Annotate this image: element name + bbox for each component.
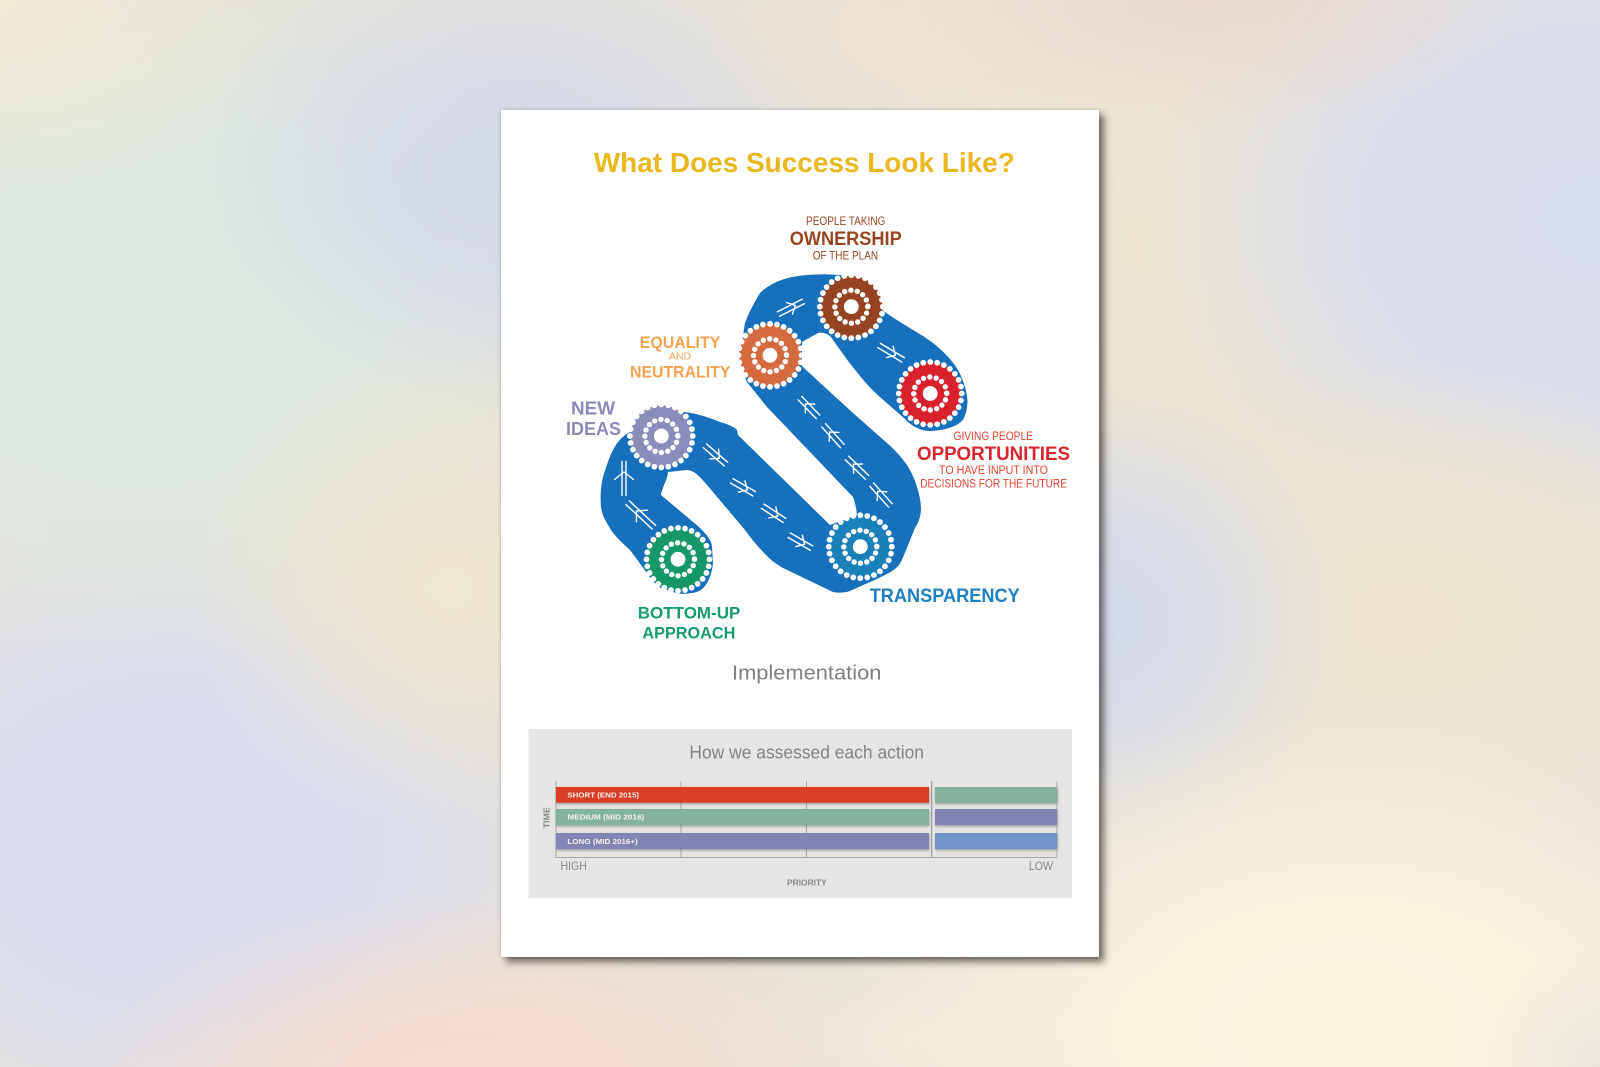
label: opportunities: OPPORTUNITIES <box>917 443 1070 465</box>
label: bottom-up approach: BOTTOM-UP <box>638 603 740 622</box>
label: ownership <box>790 215 902 262</box>
icon: equality medallion <box>738 324 802 387</box>
chart heading: How we assessed each action <box>689 742 924 762</box>
label: transparency: TRANSPARENCY <box>870 586 1020 607</box>
bar labels <box>567 791 645 846</box>
label: new ideas: IDEAS <box>566 419 621 439</box>
track mark 6 <box>786 530 815 554</box>
label: equality and neutrality: NEUTRALITY <box>630 362 730 381</box>
track mark 5 <box>759 501 788 526</box>
x-axis label: PRIORITY <box>787 878 827 888</box>
track mark 7 <box>867 480 895 510</box>
label: new ideas: NEW <box>571 399 615 419</box>
label: equality and neutrality: AND <box>669 351 692 363</box>
panel: document page <box>501 110 1099 957</box>
track mark 11 <box>775 296 806 320</box>
x-axis end labels: LOW <box>1029 859 1054 873</box>
label: equality and neutrality: EQUALITY <box>640 333 720 352</box>
title: What Does Success Look Like? <box>594 147 1015 178</box>
label: bottom-up approach: APPROACH <box>642 624 735 643</box>
label: ownership: OWNERSHIP <box>790 228 902 250</box>
track mark 8 <box>842 453 872 482</box>
track mark 10 <box>795 394 823 421</box>
track mark 12 <box>876 340 906 365</box>
x-axis end labels <box>560 859 1054 873</box>
label: opportunities: GIVING PEOPLE <box>954 430 1033 443</box>
track mark 1 <box>622 497 659 533</box>
bar labels: MEDIUM (MID 2016) <box>567 813 645 822</box>
chart axes and grid <box>556 781 1057 858</box>
label: opportunities <box>917 430 1070 490</box>
label: ownership: PEOPLE TAKING <box>806 215 885 228</box>
x-axis end labels: HIGH <box>560 859 587 873</box>
y-axis label: TIME <box>542 807 552 828</box>
bar labels: SHORT (END 2015) <box>567 791 639 800</box>
label: ownership: OF THE PLAN <box>813 249 878 262</box>
track mark 9 <box>819 421 847 450</box>
icon: opportunities medallion <box>899 362 962 425</box>
icon: ownership medallion <box>820 275 883 338</box>
track mark 2 <box>614 462 634 496</box>
label: equality and neutrality <box>630 333 730 381</box>
priority matrix bars <box>556 787 1057 849</box>
heading: implementation: Implementation <box>732 662 881 684</box>
label: new ideas <box>566 399 621 439</box>
icon: new ideas medallion <box>630 404 693 468</box>
label: opportunities: TO HAVE INPUT INTO <box>939 464 1048 477</box>
icon: transparency medallion <box>829 515 892 578</box>
label: bottom-up approach <box>638 603 740 643</box>
track mark 4 <box>728 475 758 499</box>
label: opportunities: DECISIONS FOR THE FUTURE <box>920 477 1067 490</box>
track mark 3 <box>701 441 730 469</box>
bar labels: LONG (MID 2016+) <box>567 837 638 846</box>
winding blue path <box>601 274 967 594</box>
walking track marks along the path <box>614 296 906 554</box>
icon: bottom-up medallion <box>646 528 710 591</box>
panel: how we assessed each action <box>528 729 1072 898</box>
